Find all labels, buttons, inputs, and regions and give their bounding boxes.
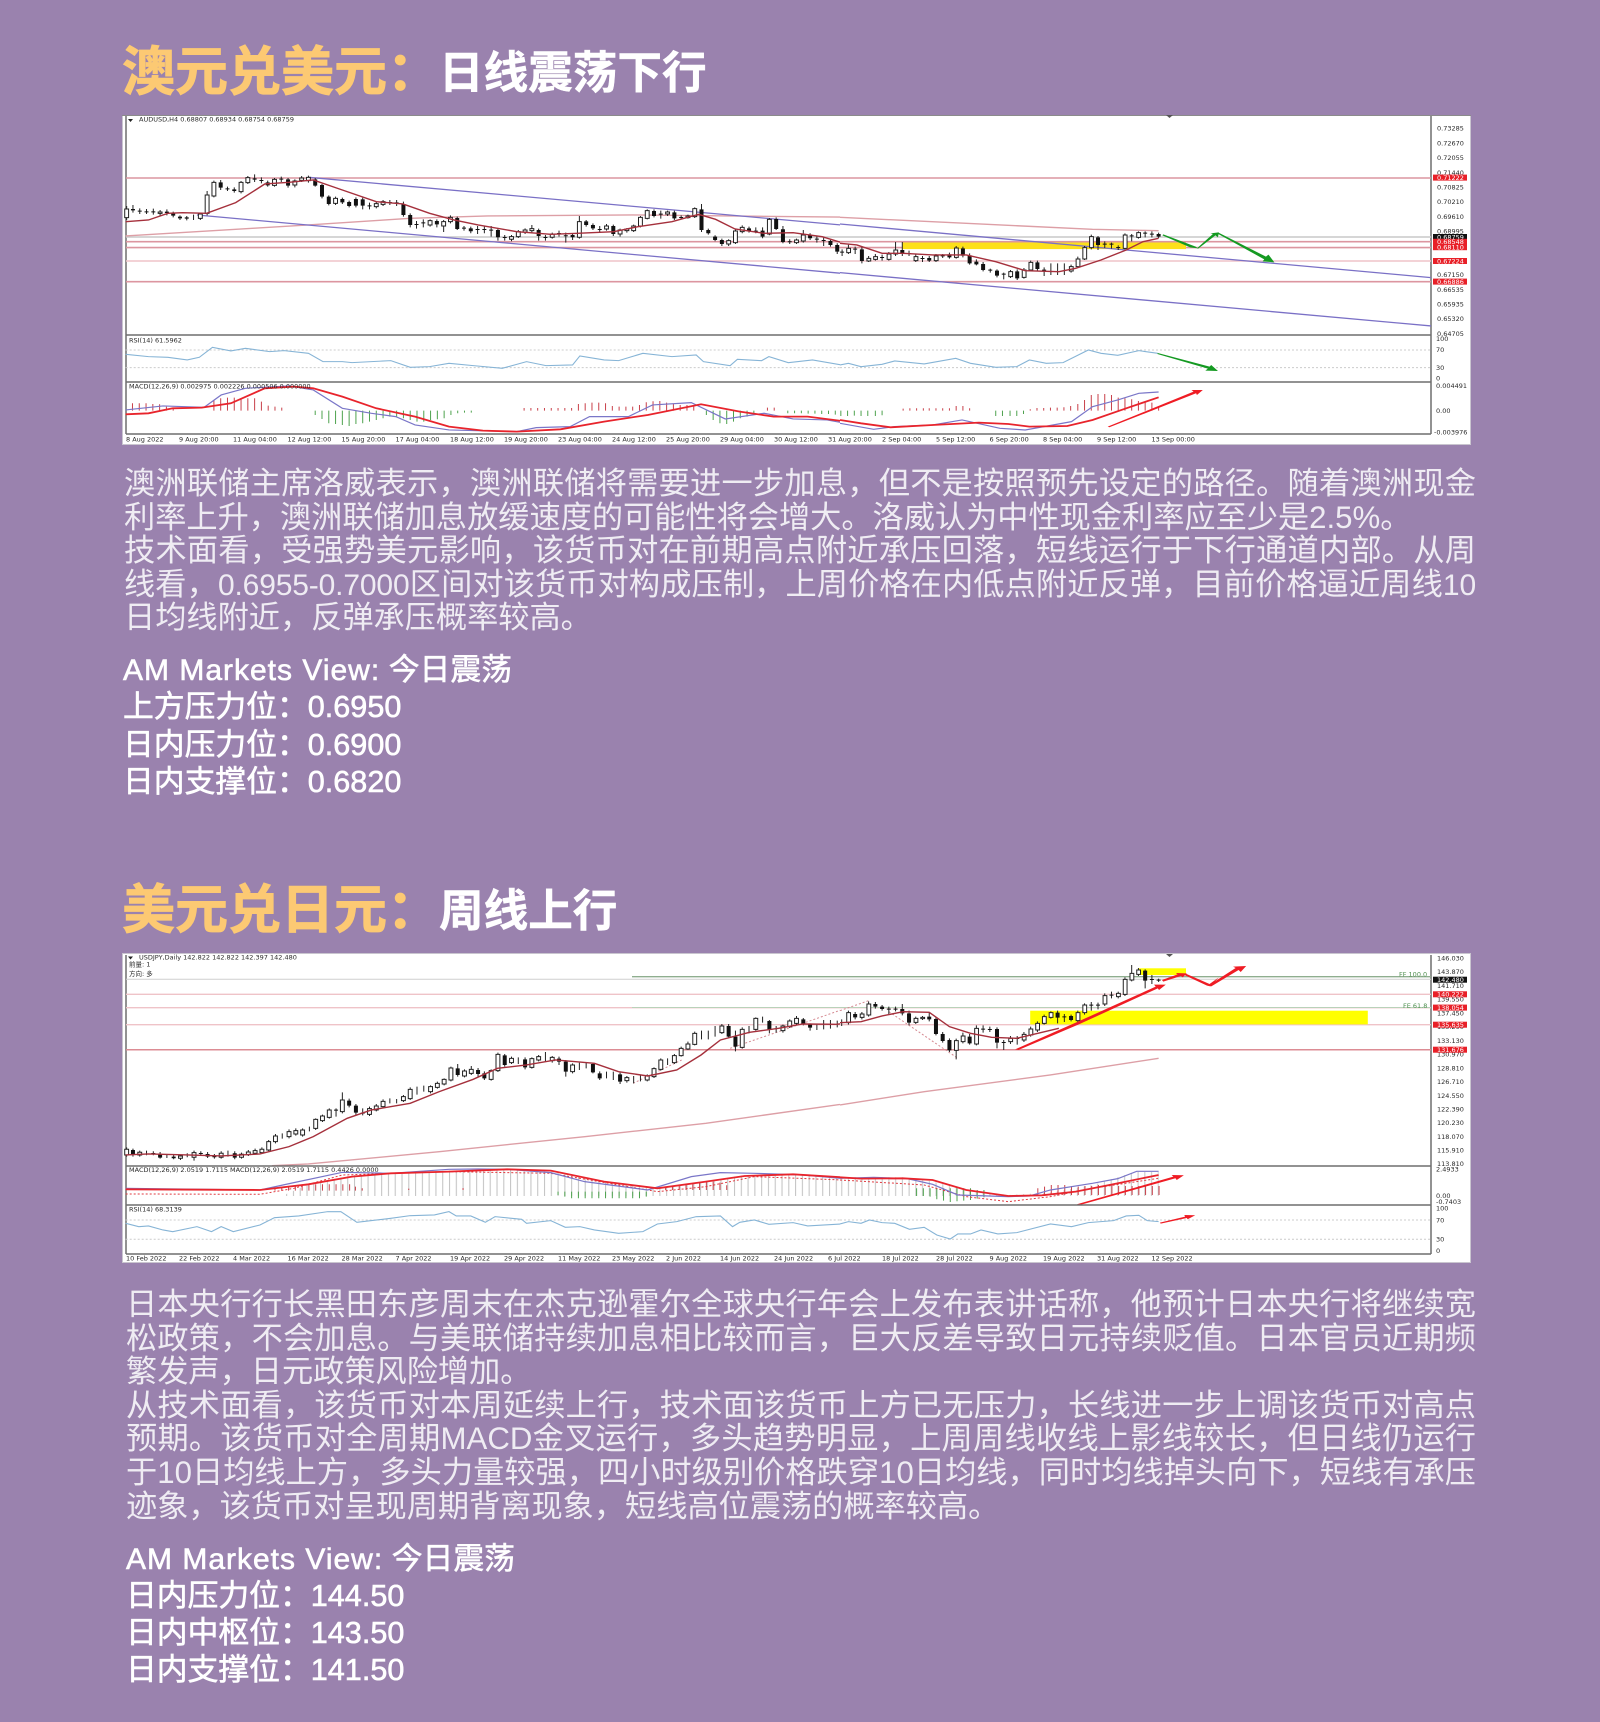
price axis labels: 0.68759 bbox=[1437, 234, 1464, 242]
chart header labels: FF 100.0 bbox=[1399, 970, 1427, 978]
time axis labels: 28 Jul 2022 bbox=[936, 1254, 973, 1262]
chart header labels bbox=[128, 954, 1427, 1214]
price axis labels: 0.70210 bbox=[1437, 198, 1464, 206]
price axis labels: 138.054 bbox=[1437, 1004, 1464, 1012]
chart header labels: FE 61.8 bbox=[1403, 1002, 1427, 1010]
text block: AUD/USD commentary bbox=[124, 466, 1476, 635]
chart header labels bbox=[128, 115, 1173, 390]
price axis labels: 0 bbox=[1436, 1247, 1440, 1255]
time axis labels: 30 Aug 12:00 bbox=[774, 436, 818, 444]
time axis labels: 29 Apr 2022 bbox=[504, 1254, 544, 1262]
price axis labels: 70 bbox=[1436, 1216, 1444, 1224]
price axis labels: 113.810 bbox=[1437, 1160, 1464, 1168]
chart header labels: USDJPY,Daily 142.822 142.822 142.397 142.480 bbox=[139, 954, 297, 962]
text block: AUD/USD key levels: 日内压力位：0.6900 bbox=[123, 727, 401, 762]
price axis labels: 118.070 bbox=[1437, 1133, 1464, 1141]
text block: USD/JPY key levels bbox=[126, 1540, 515, 1687]
price axis labels: 122.390 bbox=[1437, 1106, 1464, 1114]
panel separators bbox=[126, 335, 1431, 434]
price axis labels: 0.00 bbox=[1436, 407, 1450, 415]
text block: USD/JPY key levels: 日内中枢位：143.50 bbox=[126, 1615, 404, 1650]
time axis labels: 12 Sep 2022 bbox=[1152, 1254, 1193, 1262]
title: AUD/USD daily range-bound lower bbox=[122, 43, 707, 102]
chart header labels: MACD(12,26,9) 2.0519 1.7115 MACD(12,26,9) 2.0519 1.7115 0.4426 0.0000 bbox=[129, 1166, 379, 1174]
time axis labels: 9 Aug 2022 bbox=[990, 1254, 1027, 1262]
candles left half bbox=[125, 174, 860, 432]
time axis labels: 23 Aug 04:00 bbox=[558, 436, 602, 444]
text block: USD/JPY commentary: 松政策，不会加息。与美联储持续加息相比较而言，巨大反差导致日元持续贬值。日本官员近期频 bbox=[126, 1321, 1476, 1356]
time axis labels: 8 Aug 2022 bbox=[126, 436, 164, 444]
price axis labels: 0.72670 bbox=[1437, 140, 1464, 148]
price axis labels: 0.72055 bbox=[1437, 154, 1464, 162]
yellow zone bbox=[902, 242, 1186, 249]
time axis labels: 15 Aug 20:00 bbox=[342, 436, 385, 444]
time axis labels: 2 Sep 04:00 bbox=[882, 436, 921, 444]
price axis labels: -0.003976 bbox=[1434, 428, 1467, 436]
time axis labels: 11 Aug 04:00 bbox=[233, 436, 277, 444]
price axis labels: 0.65320 bbox=[1437, 315, 1464, 323]
time axis labels: 13 Sep 00:00 bbox=[1152, 436, 1195, 444]
text block: USD/JPY key levels: 日内支撑位：141.50 bbox=[126, 1652, 404, 1687]
text block: USD/JPY key levels: 日内压力位：144.50 bbox=[126, 1578, 404, 1613]
price axis labels: 0.71440 bbox=[1437, 169, 1464, 177]
price axis labels: 30 bbox=[1436, 1236, 1444, 1244]
text block: AUD/USD key levels bbox=[122, 652, 512, 799]
time axis labels: 31 Aug 2022 bbox=[1097, 1254, 1139, 1262]
candles left half bbox=[125, 1003, 860, 1239]
price axis labels: 0.68995 bbox=[1437, 228, 1464, 236]
time axis labels bbox=[126, 1254, 1193, 1262]
text block: AUD/USD commentary: 技术面看，受强势美元影响，该货币对在前期高点附近承压回落，短线运行于下行通道内部。从周 bbox=[124, 533, 1476, 568]
time axis labels: 19 Aug 20:00 bbox=[504, 436, 548, 444]
price axis labels: 0.67224 bbox=[1437, 258, 1464, 266]
price axis labels: 0.64705 bbox=[1437, 330, 1464, 338]
text block: USD/JPY commentary bbox=[126, 1287, 1476, 1524]
price axis labels: 120.230 bbox=[1437, 1119, 1464, 1127]
text block: USD/JPY commentary: 日本央行行长黑田东彦周末在杰克逊霍尔全球央行年会上发布表讲话称，他预计日本央行将继续宽 bbox=[126, 1287, 1476, 1322]
text block: USD/JPY commentary: 预期。该货币对全周期MACD金叉运行，多头趋势明显，上周周线收线上影线较长，但日线仍运行 bbox=[126, 1421, 1476, 1456]
price axis labels: 2.4933 bbox=[1436, 1166, 1459, 1174]
time axis labels: 16 Mar 2022 bbox=[288, 1254, 329, 1262]
title: AUD/USD daily range-bound lower: 澳元兑美元： bbox=[122, 43, 440, 102]
chart header labels: 前量: 1 bbox=[129, 960, 150, 968]
price axis labels: 0.004491 bbox=[1436, 382, 1467, 390]
red forecast arrows bbox=[1015, 966, 1246, 1224]
time axis labels: 25 Aug 20:00 bbox=[666, 436, 710, 444]
chart header labels: RSI(14) 68.3139 bbox=[129, 1206, 182, 1214]
price axis labels bbox=[1433, 124, 1467, 436]
chart header labels: MACD(12,26,9) 0.002975 0.002226 0.000506 0.000000 bbox=[129, 382, 311, 390]
time axis labels: 6 Jul 2022 bbox=[828, 1254, 861, 1262]
text block: AUD/USD key levels: AM Markets View: 今日震荡 bbox=[123, 652, 512, 687]
price axis labels: 135.635 bbox=[1437, 1021, 1464, 1029]
text block: AUD/USD commentary: 日均线附近，反弹承压概率较高。 bbox=[124, 600, 592, 635]
text block: USD/JPY commentary: 迹象，该货币对呈现周期背离现象，短线高位震荡的概率较高。 bbox=[126, 1489, 999, 1524]
price axis labels: 0.66886 bbox=[1437, 278, 1464, 286]
price axis labels: 0.67150 bbox=[1437, 271, 1464, 279]
time axis labels: 18 Jul 2022 bbox=[882, 1254, 919, 1262]
panel separators bbox=[126, 1166, 1431, 1254]
candles right half bbox=[840, 217, 1431, 430]
candles right half bbox=[840, 965, 1431, 1239]
chart header labels: AUDUSD,H4 0.68807 0.68934 0.68754 0.68759 bbox=[139, 116, 294, 124]
text block: AUD/USD commentary: 线看，0.6955-0.7000区间对该货币对构成压制，上周价格在内低点附近反弹，目前价格逼近周线10 bbox=[124, 567, 1476, 602]
price axis labels: 0 bbox=[1436, 374, 1440, 382]
time axis labels: 11 May 2022 bbox=[558, 1254, 600, 1262]
price axis labels: 0.66535 bbox=[1437, 286, 1464, 294]
horizontal support and resistance lines bbox=[126, 178, 1431, 282]
time axis labels: 2 Jun 2022 bbox=[666, 1254, 701, 1262]
time axis labels: 19 Apr 2022 bbox=[450, 1254, 490, 1262]
price axis labels: 133.130 bbox=[1437, 1037, 1464, 1045]
price axis labels: 139.550 bbox=[1437, 996, 1464, 1004]
price axis labels: 128.810 bbox=[1437, 1064, 1464, 1072]
text block: AUD/USD commentary: 利率上升，澳洲联储加息放缓速度的可能性将会增大。洛威认为中性现金利率应至少是2.5%。 bbox=[124, 500, 1411, 535]
time axis labels: 9 Aug 20:00 bbox=[179, 436, 219, 444]
time axis labels: 18 Aug 12:00 bbox=[450, 436, 494, 444]
text block: USD/JPY commentary: 繁发声，日元政策风险增加。 bbox=[126, 1354, 531, 1389]
price axis labels: 131.676 bbox=[1437, 1046, 1464, 1054]
time axis labels: 24 Aug 12:00 bbox=[612, 436, 656, 444]
price axis labels: -0.7403 bbox=[1436, 1198, 1461, 1206]
price axis labels: 143.870 bbox=[1437, 968, 1464, 976]
yellow zones bbox=[1030, 968, 1368, 1024]
price axis labels: 0.69610 bbox=[1437, 213, 1464, 221]
time axis labels: 31 Aug 20:00 bbox=[828, 436, 872, 444]
price axis labels: 0.00 bbox=[1436, 1192, 1450, 1200]
chart: USD/JPY daily candlestick with MACD and RSI bbox=[122, 953, 1471, 1263]
price axis labels: 124.550 bbox=[1437, 1092, 1464, 1100]
time axis labels bbox=[126, 436, 1195, 444]
price axis labels: 115.910 bbox=[1437, 1146, 1464, 1154]
price axis labels: 141.710 bbox=[1437, 982, 1464, 990]
time axis labels: 5 Sep 12:00 bbox=[936, 436, 975, 444]
price axis labels: 137.450 bbox=[1437, 1010, 1464, 1018]
price axis labels: 135.290 bbox=[1437, 1023, 1464, 1031]
time axis labels: 23 May 2022 bbox=[612, 1254, 654, 1262]
time axis labels: 4 Mar 2022 bbox=[233, 1254, 270, 1262]
price axis labels: 142.480 bbox=[1437, 976, 1464, 984]
price axis labels bbox=[1433, 954, 1467, 1255]
time axis labels: 14 Jun 2022 bbox=[720, 1254, 759, 1262]
chart: AUD/USD H4 candlestick with RSI and MACD bbox=[122, 115, 1471, 445]
price axis labels: 0.68110 bbox=[1437, 244, 1464, 252]
text block: USD/JPY commentary: 于10日均线上方，多头力量较强，四小时级别价格跌穿10日均线，同时均线掉头向下，短线有承压 bbox=[126, 1455, 1476, 1490]
time axis labels: 9 Sep 12:00 bbox=[1097, 436, 1136, 444]
price axis labels: 130.970 bbox=[1437, 1050, 1464, 1058]
time axis labels: 22 Feb 2022 bbox=[179, 1254, 219, 1262]
price axis labels: 0.71222 bbox=[1437, 174, 1464, 182]
price axis labels: 0.68548 bbox=[1437, 238, 1464, 246]
price axis labels: 126.710 bbox=[1437, 1078, 1464, 1086]
time axis labels: 10 Feb 2022 bbox=[126, 1254, 166, 1262]
price axis labels: 0.73285 bbox=[1437, 124, 1464, 132]
text block: AUD/USD commentary: 澳洲联储主席洛威表示，澳洲联储将需要进一步加息，但不是按照预先设定的路径。随着澳洲现金 bbox=[124, 466, 1476, 501]
title: USD/JPY weekly uptrend: 周线上行 bbox=[439, 887, 617, 936]
time axis labels: 8 Sep 04:00 bbox=[1043, 436, 1082, 444]
time axis labels: 6 Sep 20:00 bbox=[990, 436, 1029, 444]
price axis labels: 70 bbox=[1436, 346, 1444, 354]
time axis labels: 29 Aug 04:00 bbox=[720, 436, 764, 444]
text block: USD/JPY key levels: AM Markets View: 今日震荡 bbox=[126, 1540, 515, 1576]
price axis labels: 0.65935 bbox=[1437, 300, 1464, 308]
text block: AUD/USD key levels: 日内支撑位：0.6820 bbox=[123, 764, 401, 799]
red forecast arrow bbox=[1108, 390, 1203, 427]
text block: AUD/USD key levels: 上方压力位：0.6950 bbox=[123, 689, 401, 724]
time axis labels: 19 Aug 2022 bbox=[1043, 1254, 1085, 1262]
chart header labels: RSI(14) 61.5962 bbox=[129, 336, 182, 344]
horizontal levels bbox=[126, 977, 1431, 1050]
price axis labels: 146.030 bbox=[1437, 954, 1464, 962]
title: AUD/USD daily range-bound lower: 日线震荡下行 bbox=[439, 49, 707, 98]
time axis labels: 24 Jun 2022 bbox=[774, 1254, 813, 1262]
price axis labels: 100 bbox=[1436, 335, 1448, 343]
time axis labels: 17 Aug 04:00 bbox=[396, 436, 439, 444]
text block: USD/JPY commentary: 从技术面看，该货币对本周延续上行，技术面该货币上方已无压力，长线进一步上调该货币对高点 bbox=[126, 1388, 1476, 1423]
price axis labels: 0.70825 bbox=[1437, 184, 1464, 192]
time axis labels: 7 Apr 2022 bbox=[396, 1254, 432, 1262]
price axis labels: 30 bbox=[1436, 364, 1444, 372]
time axis labels: 12 Aug 12:00 bbox=[288, 436, 331, 444]
price axis labels: 140.222 bbox=[1437, 990, 1464, 998]
chart header labels: 方向: 多 bbox=[129, 969, 153, 978]
title: USD/JPY weekly uptrend: 美元兑日元： bbox=[122, 881, 440, 940]
green forecast arrows bbox=[1157, 232, 1274, 371]
title: USD/JPY weekly uptrend bbox=[122, 881, 617, 940]
price axis labels: 100 bbox=[1436, 1204, 1448, 1212]
time axis labels: 28 Mar 2022 bbox=[342, 1254, 383, 1262]
